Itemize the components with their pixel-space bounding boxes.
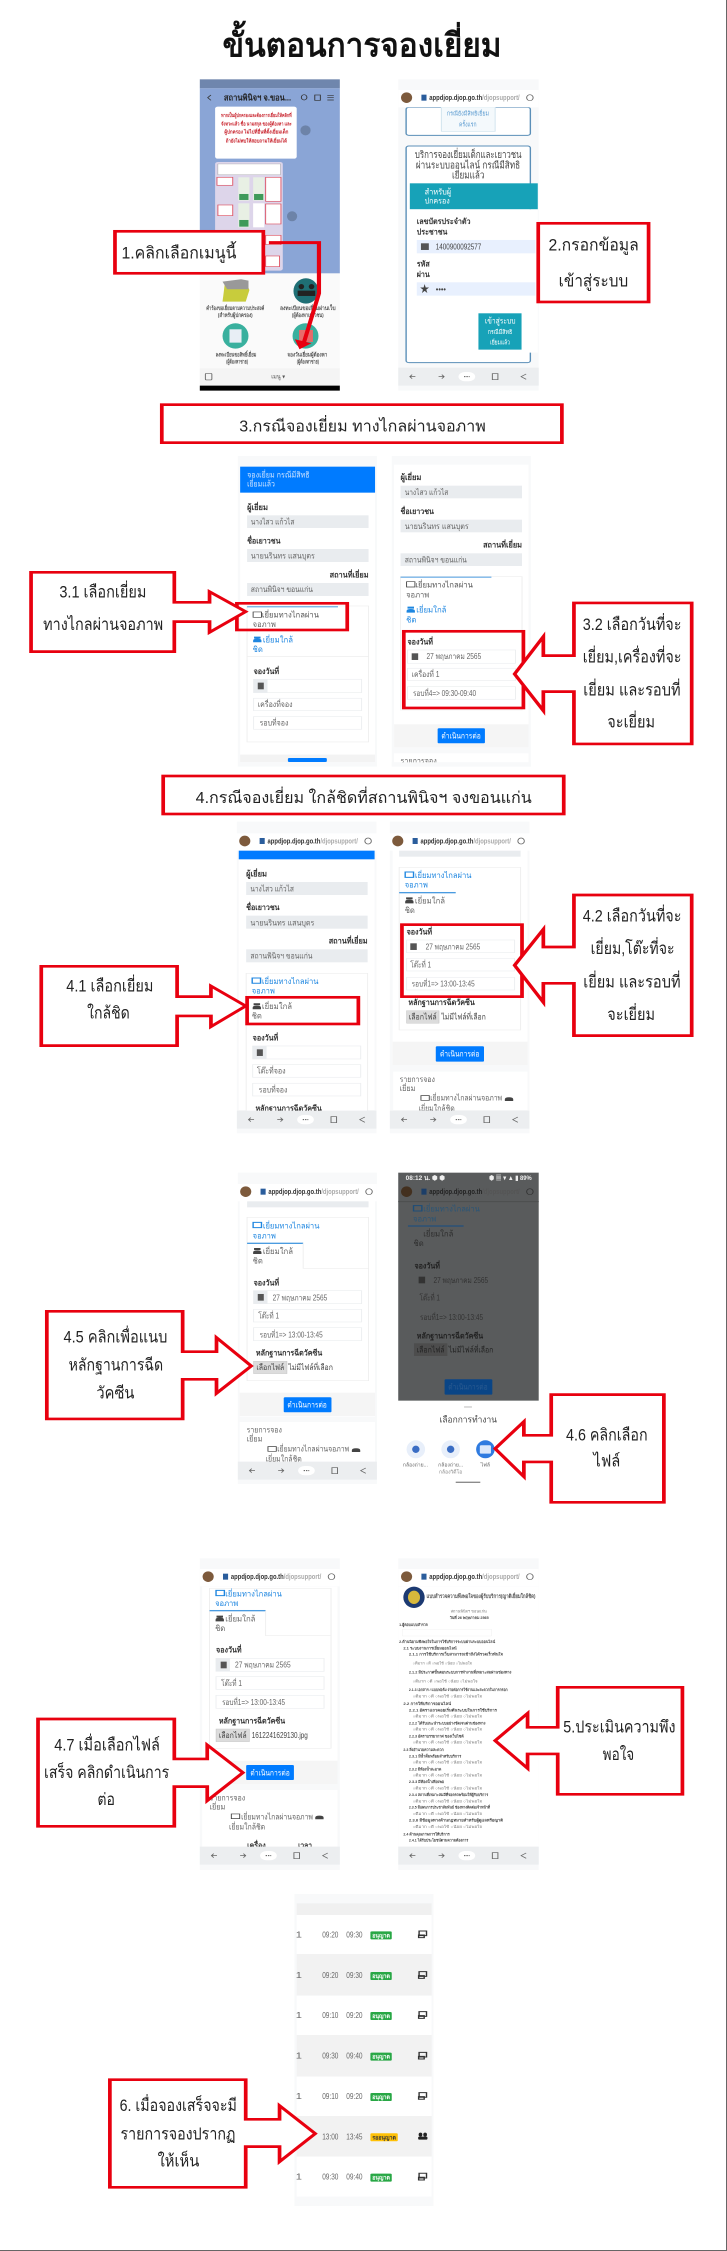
phone: choose remote visit — [238, 456, 377, 767]
phone: choose remote visit: ผู้เยี่ยม — [247, 501, 268, 513]
callout: 5 rate satisfaction — [495, 1687, 682, 1794]
phone: date and booth selected: สถานที่เยี่ยม — [483, 539, 522, 550]
phone: file picker dimmed: กล้องถ่าย... — [403, 1462, 428, 1468]
phone: attach vaccine proof: เยี่ยมใกล้ — [263, 1246, 293, 1256]
section: steps 4.5 and 4.6 — [47, 1173, 664, 1502]
row: 09:20 to 09:30 — [296, 1971, 427, 1980]
phone: choose remote visit: สถานที่เยี่ยม — [330, 568, 369, 580]
phone: satisfaction survey: ○ดีมาก ○ดี ○พอใช้ ○น้อย ○ไม่พอใจ — [413, 1825, 483, 1829]
phone: LINE chat menu: ผู้ปกครอง ไม่ไปที่อื่นที่ตั้งเยี่ยมเด็ก — [224, 127, 289, 136]
phone: file picker dimmed: ไฟล์ — [480, 1461, 490, 1468]
row: 09:30 to 09:40: 09:40 — [346, 2173, 363, 2182]
phone: attach vaccine proof: หลักฐานการฉีดวัคซีน — [256, 1348, 322, 1358]
phone: date and booth selected: รายการจอง — [401, 757, 437, 766]
phone: choose close visit: นางไสว แก้วไส — [250, 884, 294, 894]
row: 09:20 to 09:30: อนุญาต — [372, 1974, 390, 1980]
callout: 6 booking appears in list: รายการจองปรากฏ — [121, 2125, 236, 2143]
phone: date and table selected: ชิด — [405, 906, 415, 915]
phone: date and table selected: รอบที่1=> 13:00-13:45 — [412, 978, 475, 989]
phone: date and booth selected: ชื่อเยาวชน — [401, 505, 434, 516]
section: step 3 — [31, 405, 692, 767]
phone: login form: บริการจองเยี่ยมเด็กและเยาวชน — [415, 147, 522, 160]
callout: 4.7 continue after choosing file: 4.7 เมื่อเลือกไฟล์ — [54, 1733, 160, 1755]
phone: login form: กรณียังมีสิทธิเยี่ยม — [447, 109, 489, 117]
phone: choose close visit: จองวันที่ — [253, 1032, 278, 1043]
section: steps 4.7 and 5 — [38, 1558, 682, 1870]
phone: file selected, continue: เยี่ยมใกล้ — [225, 1613, 255, 1624]
phone: LINE chat menu: ลงทะเบียนขอสิทธิ์เยี่ยม — [216, 350, 257, 358]
callout: 4.2 select date and table: จะเยี่ยม — [607, 1003, 655, 1024]
row: 09:10 to 09:20 — [296, 2092, 427, 2101]
phone: satisfaction survey: 2.3.3 มีห้องน้ำเพียงพอ — [409, 1778, 444, 1784]
phone: login form: ปกครอง — [425, 197, 450, 206]
phone: date and booth selected: รอบที่4=> 09:30-09:40 — [413, 688, 476, 698]
row: 09:30 to 09:40: 09:40 — [346, 2052, 363, 2061]
phone: file picker dimmed: รอบที่1=> 13:00-13:45 — [420, 1312, 483, 1322]
phone: login form: appdjop.djop.go.th/djopsupport/ — [429, 93, 520, 102]
row: 09:20 to 09:30: 09:30 — [346, 1931, 363, 1940]
row: 09:30 to 09:40 — [296, 2173, 427, 2182]
callout: step 2: 2.กรอกข้อมูล — [548, 237, 639, 256]
highlight: date and booth — [404, 631, 523, 708]
phone: satisfaction survey: ○ดีมาก ○ดี ○พอใช้ ○น้อย ○ไม่พอใจ — [413, 1812, 483, 1816]
row: 09:10 to 09:20: อนุญาต — [372, 2014, 390, 2020]
phone: date and booth selected: สถานพินิจฯ ขอนแก่น — [405, 556, 467, 565]
phone: date and table selected: เยี่ยมทางไกลผ่านจอภาพ — [430, 1092, 502, 1103]
phone: file picker dimmed: 27 พฤษภาคม 2565 — [433, 1276, 488, 1285]
highlight: close visit tab — [247, 997, 358, 1024]
phone: attach vaccine proof: เยี่ยมใกล้ชิด — [266, 1453, 302, 1464]
phone: login form: ผ่านระบบออนไลน์ กรณีมีสิทธิ — [416, 159, 520, 171]
phone: satisfaction survey: ○ดีมาก ○ดี ○พอใช้ ○น้อย ○ไม่พอใจ — [413, 1760, 483, 1764]
phone: satisfaction survey: 2.2.2 ได้รับแนะนำระบบอย่างชัดเจนผ่านช่องทาง — [409, 1720, 485, 1725]
phone: file selected, continue: ชิด — [215, 1624, 225, 1633]
callout: step 1: 1.คลิกเลือกเมนูนี้ — [121, 240, 237, 263]
phone: file picker dimmed — [398, 1173, 539, 1483]
phone: choose remote visit: สถานพินิจฯ ขอนแก่น — [251, 585, 313, 594]
phone: choose close visit: สถานที่เยี่ยม — [329, 935, 368, 946]
row: 09:30 to 09:40: 1 — [296, 2173, 302, 2182]
phone: attach vaccine proof: เยี่ยม — [247, 1433, 262, 1444]
phone: LINE chat menu: ลงทะเบียนขอเยี่ยมผ่านเว็บ — [280, 303, 336, 312]
phone: file selected, continue: 1612241629130.jpg — [252, 1731, 308, 1740]
phone: file picker dimmed: เยี่ยมทางไกลผ่าน — [423, 1203, 480, 1214]
callout: 4.7 continue after choosing file: เสร็จ คลิกดำเนินการ — [44, 1761, 169, 1782]
phone: choose remote visit: นายนรินทร แสนบุตร — [251, 552, 315, 561]
phone: file selected, continue: หลักฐานการฉีดวัคซีน — [219, 1716, 285, 1726]
row: 13:00 to 13:45 pending — [322, 2133, 427, 2142]
phone: satisfaction survey: 2.3.1 มีน้ำดื่มพร้อมสำหรับบริการ — [409, 1752, 462, 1758]
phone: date and table selected: เยี่ยมใกล้ชิด — [419, 1103, 455, 1113]
phone: file selected, continue: จองวันที่ — [216, 1644, 242, 1655]
phone: date and table selected: เยี่ยมทางไกลผ่าน — [415, 870, 472, 880]
phone: login form: •••• — [436, 285, 446, 294]
phone: login form: เยี่ยมแล้ว — [452, 168, 484, 181]
phone: satisfaction survey: 2.2.1 อัตราแถวคอยเริ่มต้นระบบในการใช้บริการ — [409, 1708, 498, 1712]
row: 09:20 to 09:30: 09:30 — [346, 1971, 363, 1980]
callout: 3.1 select remote visit — [31, 572, 246, 652]
phone: choose remote visit: จอภาพ — [253, 620, 276, 629]
phone: date and booth selected: ดำเนินการต่อ — [441, 732, 481, 741]
phone: attach vaccine proof: เยี่ยมทางไกลผ่านจอภาพ — [277, 1443, 349, 1454]
phone: date and booth selected: ผู้เยี่ยม — [401, 471, 421, 483]
phone: satisfaction survey: 2.4 ด้านคุณภาพการให้บริการ — [403, 1831, 450, 1837]
phone: attach vaccine proof: รอบที่1=> 13:00-13:45 — [260, 1329, 323, 1340]
phone: choose close visit: สถานพินิจฯ ขอนแก่น — [250, 952, 313, 961]
row: 13:00 to 13:45 pending: 13:00 — [322, 2133, 338, 2142]
phone: choose remote visit: เยี่ยมใกล้ — [263, 634, 293, 645]
row: 09:10 to 09:20: 09:20 — [346, 2092, 363, 2101]
phone: choose remote visit: ชิด — [253, 645, 263, 654]
callout: 6 booking appears in list: ให้เห็น — [158, 2150, 199, 2171]
phone: choose remote visit: เยี่ยมทางไกลผ่าน — [262, 609, 319, 620]
heading: step 3: 3.กรณีจองเยี่ยม ทางไกลผ่านจอภาพ — [239, 415, 486, 436]
phone: attach vaccine proof: โต๊ะที่ 1 — [258, 1310, 279, 1321]
phone: file selected, continue: จอภาพ — [215, 1599, 238, 1608]
phone: date and booth selected: จอภาพ — [406, 591, 429, 600]
phone: LINE chat menu: ถ้ายังไม่พบให้สอบถามให้เยี่ยมได้ — [226, 137, 287, 144]
phone: LINE chat menu: จังหวะแล้ว ชื่อ นามสกุล ของผู้ต้องหา และ — [221, 120, 292, 128]
row: 09:30 to 09:40: 09:30 — [322, 2173, 338, 2182]
phone: satisfaction survey: 2.3.5 มีแผนการประชาสัมพันธ์ ช่องทางติดต่อเจ้าหน้าที่ — [409, 1805, 490, 1809]
row: 09:10 to 09:20: อนุญาต — [372, 2095, 390, 2101]
phone: satisfaction survey: สถานพินิจฯ ขอนแก่น — [451, 1609, 487, 1613]
phone: file selected, continue: เวลา — [298, 1841, 312, 1850]
phone: file picker dimmed: เลือกไฟล์ — [417, 1345, 445, 1355]
phone: satisfaction survey: ○ดีมาก ○ดี ○พอใช้ ○น้อย ○ไม่พอใจ — [413, 1727, 483, 1731]
row: 09:20 to 09:30: 1 — [296, 1971, 302, 1980]
phone: satisfaction survey: 2.1.1 การใช้บริการเว็บสามารถเข้าถึงได้รวดเร็วทันใจ — [409, 1651, 503, 1656]
callout: step 2: เข้าสู่ระบบ — [559, 273, 628, 292]
phone: satisfaction survey: 2.2.3 อัตราบรรยากาศ ของเว็บไซต์ — [409, 1732, 464, 1738]
phone: choose close visit: นายนรินทร แสนบุตร — [250, 919, 314, 928]
phone: file selected, continue: เยี่ยม — [210, 1801, 225, 1812]
callout: 3.1 select remote visit: 3.1 เลือกเยี่ยม — [59, 580, 146, 601]
phone: date and table selected: 27 พฤษภาคม 2565 — [426, 943, 480, 952]
phone: choose close visit: ชื่อเยาวชน — [246, 901, 280, 912]
phone: login form: เยี่ยมแล้ว — [490, 338, 510, 346]
phone: choose close visit: ผู้เยี่ยม — [246, 867, 267, 880]
phone: LINE chat menu — [200, 79, 340, 391]
phone: choose close visit — [236, 822, 377, 1133]
row: 09:30 to 09:40: อนุญาต — [372, 2055, 390, 2060]
phone: LINE chat menu: (ผู้ต้องหาชาย) — [297, 358, 319, 366]
phone: satisfaction survey: 2.1.3 เอกสาร / แบบฟอร์ม ง่ายต่อการใช้งานและสะดวกในการกรอก — [409, 1687, 508, 1692]
phone: LINE chat menu: เมนู ▾ — [271, 373, 285, 380]
phone: file picker dimmed: จองวันที่ — [414, 1259, 440, 1271]
arrow: step 1 to menu — [269, 243, 319, 349]
phone: LINE chat menu: (ผู้ต้องหาชาย) — [226, 358, 248, 366]
phone: date and booth selected: ชิด — [406, 616, 416, 625]
phone: file picker dimmed: เยี่ยมใกล้ — [423, 1228, 453, 1239]
phone: choose close visit: จอภาพ — [252, 987, 275, 996]
phone: login form: เข้าสู่ระบบ — [485, 317, 516, 326]
phone: LINE chat menu: (สำหรับผู้ปกครอง) — [218, 311, 253, 319]
phone: satisfaction survey: ○ดีมาก ○ดี ○พอใช้ ○น้อย ○ไม่พอใจ — [413, 1679, 478, 1683]
phone: attach vaccine proof: appdjop.djop.go.th/djopsupport/ — [268, 1187, 359, 1196]
phone: login form: สำหรับผู้ — [425, 188, 451, 197]
row: 09:10 to 09:20: 09:10 — [322, 2011, 338, 2020]
callout: 3.1 select remote visit: ทางไกลผ่านจอภาพ — [43, 614, 163, 634]
phone: attach vaccine proof: ชิด — [253, 1257, 263, 1266]
phone: attach vaccine proof: เลือกไฟล์ — [256, 1363, 284, 1372]
row: 09:20 to 09:30: 09:20 — [322, 1931, 338, 1940]
phone: login form — [398, 79, 539, 391]
phone: satisfaction survey: วันที่ 26 พฤษภาคม 2565 — [450, 1615, 489, 1620]
heading: step 4 — [163, 776, 564, 814]
callout: 4.1 select close visit: ใกล้ชิด — [87, 1003, 130, 1022]
phone: date and booth selected — [392, 456, 531, 767]
phone: login form: ครั้งแรก — [459, 120, 477, 128]
heading: step 3 — [162, 405, 562, 443]
callout: 4.1 select close visit: 4.1 เลือกเยี่ยม — [66, 974, 153, 995]
phone: date and table selected: เยี่ยมใกล้ — [415, 895, 445, 906]
callout: 4.5 attach vaccine proof: 4.5 คลิกเพื่อแนบ — [64, 1325, 167, 1347]
callout: 5 rate satisfaction: พอใจ — [603, 1745, 634, 1764]
section: step 4 — [41, 776, 692, 1133]
phone: satisfaction survey: ○ดีมาก ○ดี ○พอใช้ ○น้อย ○ไม่พอใจ — [413, 1799, 483, 1803]
phone: file selected, continue: โต๊ะที่ 1 — [221, 1678, 242, 1688]
phone: satisfaction survey: ○ดีมาก ○ดี ○พอใช้ ○น้อย ○ไม่พอใจ — [413, 1661, 472, 1665]
phone: file selected, continue: เยี่ยมทางไกลผ่าน — [225, 1588, 282, 1599]
callout: 4.5 attach vaccine proof: วัคซีน — [96, 1383, 135, 1402]
row: 09:30 to 09:40 — [296, 2052, 427, 2061]
row: 09:20 to 09:30 — [296, 1931, 427, 1940]
phone: satisfaction survey: 2.4.1 ได้รับประโยชน์ตามความต้องการ — [409, 1838, 469, 1842]
phone: choose close visit: หลักฐานการฉีดวัคซีน — [255, 1104, 322, 1113]
phone: login form: ผ่าน — [417, 270, 430, 279]
row: 09:10 to 09:20: 09:10 — [322, 2092, 338, 2101]
phone: satisfaction survey: ○ดีมาก ○ดี ○พอใช้ ○น้อย ○ไม่พอใจ — [413, 1740, 483, 1744]
row: 09:20 to 09:30: อนุญาต — [372, 1933, 390, 1939]
phone: LINE chat menu: คำร้องขอเยี่ยมตามความประสงค์ — [206, 303, 264, 312]
phone: satisfaction survey: 2.1 ระบบงานการเยี่ยมออนไลน์ — [403, 1645, 458, 1650]
phone: file picker dimmed: จอภาพ — [413, 1215, 436, 1224]
phone: satisfaction survey: ○ดีมาก ○ดี ○พอใช้ ○น้อย ○ไม่พอใจ — [413, 1773, 483, 1777]
phone: choose remote visit: จองวันที่ — [254, 665, 279, 676]
phone: choose remote visit: เครื่องที่จอง — [258, 699, 293, 709]
phone: choose close visit: รอบที่จอง — [259, 1084, 288, 1095]
phone: satisfaction survey: 2.3.2 มีห้องน้ำสะอาด — [409, 1765, 441, 1771]
phone: date and booth selected: เยี่ยมทางไกลผ่าน — [415, 579, 473, 590]
callout: step 1 — [115, 231, 263, 273]
phone: file picker dimmed: appdjop.djop.go.th/djopsupport/ — [429, 1187, 520, 1196]
row: 09:10 to 09:20: 1 — [296, 2092, 302, 2101]
phone: choose close visit: เยี่ยมทางไกลผ่าน — [262, 976, 319, 986]
phone: satisfaction survey: ○ดีมาก ○ดี ○พอใช้ ○น้อย ○ไม่พอใจ — [413, 1786, 483, 1790]
phone: LINE chat menu: หากเป็นผู้ปกครองและต้องการเยี่ยมให้คลิกที่ — [221, 111, 292, 119]
phone: file picker dimmed: กล้องถ่าย... — [438, 1462, 463, 1468]
phone: choose close visit: โต๊ะที่จอง — [257, 1065, 286, 1076]
phone: file selected, continue: 27 พฤษภาคม 2565 — [235, 1661, 291, 1670]
phone: choose close visit: เยี่ยมใกล้ — [262, 1001, 292, 1011]
phone: date and booth selected: นางไสว แก้วไส — [405, 488, 448, 497]
phone: satisfaction survey: appdjop.djop.go.th/djopsupport/ — [429, 1572, 520, 1581]
phone: LINE chat menu: จองวันเยี่ยมผู้ต้องหา — [287, 350, 327, 359]
phone: login form: รหัส — [417, 259, 430, 269]
phone: date and table selected: หลักฐานการฉีดวัคซีน — [408, 998, 475, 1007]
phone: file picker dimmed: เลือกการทำงาน — [439, 1414, 497, 1425]
phone: file selected, continue: รอบที่1=> 13:00-13:45 — [222, 1697, 285, 1707]
row: 09:10 to 09:20 — [296, 2011, 427, 2020]
phone: attach vaccine proof: 27 พฤษภาคม 2565 — [273, 1294, 327, 1303]
phone: date and table selected: เยี่ยม — [400, 1083, 415, 1093]
callout: 4.5 attach vaccine proof: หลักฐานการฉีด — [69, 1356, 163, 1375]
phone: file selected, continue: เยี่ยมทางไกลผ่านจอภาพ — [241, 1811, 313, 1822]
phone: booking list table — [294, 1894, 433, 2206]
callout: 4.6 choose file: ไฟล์ — [592, 1451, 620, 1471]
phone: file picker dimmed: ไม่มีไฟล์ที่เลือก — [448, 1344, 493, 1355]
phone: file selected, continue: เลือกไฟล์ — [219, 1731, 247, 1740]
phone: choose close visit: ชิด — [252, 1012, 262, 1021]
phone: attach vaccine proof: รายการจอง — [247, 1426, 282, 1435]
phone: satisfaction survey: 2.ด้านนิยามพึงพอใจในการใช้บริการระบบผ่านระบบออนไลน์ — [399, 1639, 496, 1644]
phone: date and table selected: จองวันที่ — [407, 926, 432, 937]
phone: file picker dimmed: กล้องวิดีโอ — [439, 1469, 463, 1475]
phone: satisfaction survey: ○ดีมาก ○ดี ○พอใช้ ○น้อย ○ไม่พอใจ — [413, 1714, 483, 1718]
phone: satisfaction survey: 2.3.6 มีข้อมูลทางด้านกฎหมายสำหรับผู้ดูแลหรือญาติ — [409, 1818, 503, 1823]
phone: choose remote visit: จองเยี่ยม กรณีมีสิทธิ — [247, 469, 310, 480]
phone: date and table selected: เลือกไฟล์ — [409, 1012, 437, 1022]
phone: date and table selected: ไม่มีไฟล์ที่เลือก — [441, 1011, 486, 1022]
phone: login form: กรณีมีสิทธิ — [488, 328, 513, 336]
callout: 6 booking appears in list — [110, 2080, 315, 2187]
row: 09:20 to 09:30: 1 — [296, 1931, 302, 1940]
phone: choose remote visit: ชื่อเยาวชน — [247, 535, 281, 546]
callout: 6 booking appears in list: 6. เมื่อจองเสร็จจะมี — [120, 2094, 237, 2115]
phone: file selected, continue: ดำเนินการต่อ — [250, 1769, 290, 1778]
callout: 3.2 select date and booth: จะเยี่ยม — [607, 710, 655, 732]
phone: file selected, continue: เครื่อง — [247, 1839, 266, 1850]
phone: date and booth selected: จองวันที่ — [408, 635, 433, 647]
phone: file picker dimmed: ⬢ ▦ ▾ ▲ ▮ 89% — [489, 1174, 532, 1182]
title: ขั้นตอนการจองเยี่ยม — [223, 20, 502, 64]
phone: choose close visit: appdjop.djop.go.th/djopsupport/ — [267, 837, 358, 845]
phone: LINE chat menu: สถานพินิจฯ จ.ขอน... — [224, 93, 291, 103]
callout: 4.1 select close visit — [41, 966, 246, 1046]
row: 09:30 to 09:40: 1 — [296, 2052, 302, 2061]
section: steps 1 and 2 — [115, 79, 649, 391]
callout: 4.6 choose file — [495, 1395, 664, 1502]
phone: file picker dimmed: โต๊ะที่ 1 — [420, 1292, 440, 1303]
callout: 4.2 select date and table: เยี่ยม,โต๊ะที่จะ — [591, 937, 675, 958]
phone: satisfaction survey: 2.3 สิ่งอำนวยความสะดวก — [403, 1747, 444, 1752]
phone: satisfaction survey: 2.1.2 มีประกาศขั้นตอนระบบการทำงานที่เหมาะสมผ่านช่องทาง — [409, 1668, 511, 1674]
phone: date and table selected: ดำเนินการต่อ — [440, 1050, 479, 1059]
row: 13:00 to 13:45 pending: รออนุญาต — [372, 2135, 396, 2141]
phone: satisfaction survey: ○ดีมาก ○ดี ○พอใช้ ○น้อย ○ไม่พอใจ — [413, 1694, 483, 1698]
row: 09:30 to 09:40: 09:30 — [322, 2052, 338, 2061]
phone: attach vaccine proof: จอภาพ — [253, 1232, 276, 1241]
section: step 6 — [110, 1894, 433, 2206]
callout: 4.2 select date and table — [515, 895, 692, 1036]
heading: step 4: 4.กรณีจองเยี่ยม ใกล้ชิดที่สถานพินิจฯ จงขอนแก่น — [196, 786, 532, 807]
highlight: remote visit tab — [237, 603, 347, 630]
phone: attach vaccine proof: เยี่ยมทางไกลผ่าน — [263, 1220, 320, 1231]
phone: attach vaccine proof: ไม่มีไฟล์ที่เลือก — [288, 1362, 333, 1372]
row: 09:10 to 09:20: 09:20 — [346, 2011, 363, 2020]
callout: 4.5 attach vaccine proof — [47, 1311, 251, 1419]
row: 09:30 to 09:40: อนุญาต — [372, 2176, 390, 2181]
phone: date and booth selected: นายนรินทร แสนบุตร — [405, 522, 469, 531]
phone: satisfaction survey: 2.2 การให้บริการออนไลน์ — [403, 1701, 452, 1706]
phone: file selected, continue: เยี่ยมใกล้ชิด — [229, 1821, 265, 1832]
phone: date and booth selected: 27 พฤษภาคม 2565 — [427, 652, 481, 661]
phone: date and table selected: โต๊ะที่ 1 — [410, 959, 431, 970]
phone: attach vaccine proof: ดำเนินการต่อ — [287, 1401, 327, 1410]
phone: file picker dimmed: หลักฐานการฉีดวัคซีน — [417, 1331, 483, 1341]
row: 09:10 to 09:20: 1 — [296, 2011, 302, 2020]
phone: file picker dimmed: ชิด — [414, 1239, 424, 1248]
row: 13:00 to 13:45 pending: 13:45 — [346, 2133, 363, 2142]
phone: date and booth selected: เยี่ยมใกล้ — [416, 604, 446, 615]
phone: satisfaction survey: แบบสำรวจความพึงพอใจของผู้รับบริการ(ญาติเยี่ยมใกล้ชิด) — [427, 1591, 535, 1600]
row: 09:20 to 09:30: 09:20 — [322, 1971, 338, 1980]
callout: 4.6 choose file: 4.6 คลิกเลือก — [566, 1426, 648, 1444]
phone: login form: ★ — [420, 284, 429, 295]
phone: file selected, continue: รายการจอง — [210, 1794, 245, 1803]
phone: attach vaccine proof — [237, 1173, 377, 1484]
phone: login form: 1400900092577 — [436, 243, 481, 252]
phone: date and table selected: appdjop.djop.go.th/djopsupport/ — [420, 837, 511, 845]
callout: 3.2 select date and booth — [515, 603, 692, 744]
phone: login form: ประชาชน — [417, 227, 448, 237]
phone: file selected, continue — [200, 1558, 340, 1870]
phone: choose remote visit: เยี่ยมแล้ว — [247, 478, 275, 489]
phone: date and booth selected: เครื่องที่ 1 — [412, 669, 439, 679]
phone: date and table selected — [389, 822, 530, 1133]
phone: file picker dimmed: 08:12 น. ⬢ ⬢ — [406, 1174, 445, 1182]
phone: satisfaction survey: 1.ผู้ตอบแบบสำรวจ — [399, 1622, 428, 1628]
callout: step 2 — [538, 223, 649, 302]
phone: attach vaccine proof: จองวันที่ — [254, 1276, 279, 1288]
callout: 4.7 continue after choosing file: ต่อ — [97, 1791, 115, 1809]
phone: choose remote visit: นางไสว แก้วไส — [251, 517, 294, 527]
phone: satisfaction survey: 2.3.4 สถานที่เหมาะสมมีที่จอดรถพร้อมให้ผู้รับบริการ — [409, 1792, 489, 1798]
phone: file selected, continue: appdjop.djop.go.th/djopsupport/ — [231, 1572, 322, 1581]
phone: choose remote visit: รอบที่จอง — [260, 717, 289, 728]
phone: file picker dimmed: ดำเนินการต่อ — [448, 1383, 488, 1392]
phone: date and table selected: จอภาพ — [405, 881, 428, 890]
phone: LINE chat menu: (ผู้ต้องหาเยาวชน) — [292, 311, 324, 319]
callout: 4.7 continue after choosing file — [38, 1719, 243, 1826]
phone: satisfaction survey — [398, 1558, 539, 1870]
highlight: date and table — [402, 925, 522, 997]
phone: login form: เลขบัตรประจำตัว — [417, 217, 471, 226]
phone: date and table selected: รายการจอง — [400, 1075, 435, 1084]
